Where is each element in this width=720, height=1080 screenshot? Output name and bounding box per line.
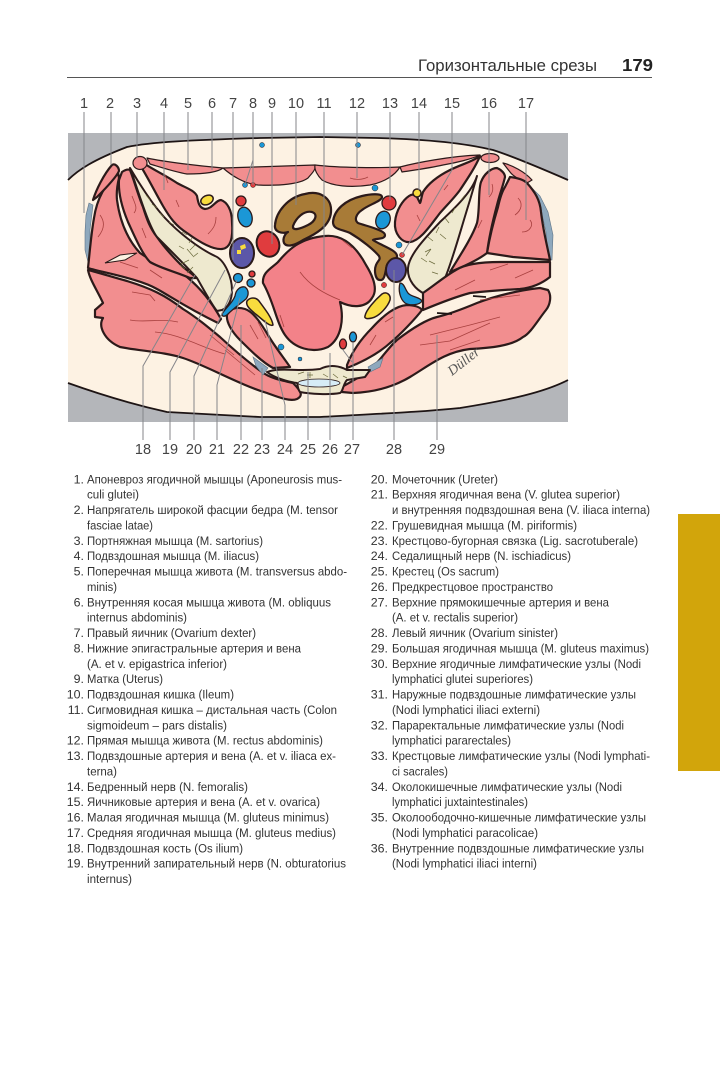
side tab (678, 514, 720, 771)
bottom callout numbers: 25 (300, 442, 316, 458)
bottom callout numbers: 28 (386, 442, 402, 458)
legend column 2: Околоободочно-кишечные лимфатические узлы (392, 811, 646, 825)
legend column 1: Апоневроз ягодичной мышцы (Aponeurosis mus- (87, 472, 342, 486)
sacrotuberous ligament right (368, 358, 383, 372)
legend column 2: (Nodi lymphatici paracolicae) (392, 826, 538, 840)
piriformis right (347, 305, 422, 368)
legend column 1: culi glutei) (87, 488, 139, 502)
legend column 1: 19. (67, 857, 84, 871)
femoral nerve right (413, 189, 421, 197)
legend column 2: Мочеточник (Ureter) (392, 472, 498, 486)
legend column 2: (Nodi lymphatici iliaci interni) (392, 857, 537, 871)
legend column 1: Прямая мышца живота (M. rectus abdominis) (87, 734, 323, 748)
legend column 2: 31. (371, 688, 388, 702)
top callout numbers: 15 (444, 96, 460, 112)
legend column 2: Верхняя ягодичная вена (V. glutea superior) (392, 488, 620, 502)
legend column 2: 34. (371, 780, 388, 794)
legend column 2: 22. (371, 518, 388, 532)
top callout numbers: 13 (382, 96, 398, 112)
legend column 1: terna) (87, 764, 117, 778)
top callout numbers: 2 (106, 96, 114, 112)
legend column 2: Левый яичник (Ovarium sinister) (392, 626, 558, 640)
legend column 1: Портняжная мышца (M. sartorius) (87, 534, 263, 548)
ilium right (408, 176, 477, 294)
abdominal wall muscles left (147, 158, 223, 174)
page number: 179 (622, 55, 653, 75)
left iliac vessels (373, 196, 396, 231)
legend column 1: 17. (67, 826, 84, 840)
iliacus left (140, 162, 232, 249)
sartorius left (133, 156, 147, 170)
legend column 2: Верхние ягодичные лимфатические узлы (Nodi (392, 657, 641, 671)
bottom callout numbers: 22 (233, 442, 249, 458)
legend column 1: Средняя ягодичная мышца (M. gluteus medius) (87, 826, 336, 840)
gluteus maximus left (88, 270, 301, 400)
legend column 2: 27. (371, 595, 388, 609)
legend column 1: 12. (67, 734, 84, 748)
legend column 1: (A. et v. epigastrica inferior) (87, 657, 227, 671)
legend column 2: Седалищный нерв (N. ischiadicus) (392, 549, 571, 563)
aponeurosis left (1) (85, 203, 93, 270)
legend column 1: Нижние эпигастральные артерия и вена (87, 642, 301, 656)
legend column 2: Крестцово-бугорная связка (Lig. sacrotuberale) (392, 534, 638, 548)
legend column 2: Околокишечные лимфатические узлы (Nodi (392, 780, 622, 794)
legend column 2: Наружные подвздошные лимфатические узлы (392, 688, 636, 702)
rectus abdominis left (223, 165, 315, 185)
legend column 2: (Nodi lymphatici iliaci externi) (392, 703, 540, 717)
legend column 2: Крестцовые лимфатические узлы (Nodi lymphati- (392, 749, 650, 763)
legend column 2: 29. (371, 642, 388, 656)
legend column 1: Внутренняя косая мышца живота (M. obliquus (87, 595, 331, 609)
sciatic nerve left (247, 298, 273, 325)
top callout numbers: 8 (249, 96, 257, 112)
legend column 2: Верхние прямокишечные артерия и вена (392, 595, 609, 609)
legend column 1: Яичниковые артерия и вена (A. et v. ovarica) (87, 795, 320, 809)
legend column 2: lymphatici juxtaintestinales) (392, 795, 528, 809)
legend column 1: 16. (67, 811, 84, 825)
femoral nerve left (199, 193, 215, 207)
legend column 2: 35. (371, 811, 388, 825)
legend column 2: 36. (371, 841, 388, 855)
legend column 1: Правый яичник (Ovarium dexter) (87, 626, 256, 640)
legend column 1: 9. (74, 672, 84, 686)
gluteal vein right (399, 283, 422, 305)
legend column 1: Сигмовидная кишка – дистальная часть (Colon (87, 703, 337, 717)
legend column 2: 30. (371, 657, 388, 671)
legend column 1: 3. (74, 534, 84, 548)
legend column 1: Внутренний запирательный нерв (N. obturatorius (87, 857, 346, 871)
bottom callout numbers: 24 (277, 442, 293, 458)
sciatic nerve right (365, 293, 390, 319)
legend column 1: 13. (67, 749, 84, 763)
top callout numbers: 17 (518, 96, 534, 112)
top callout numbers: 3 (133, 96, 141, 112)
top callout numbers (80, 96, 534, 112)
gluteus maximus right (342, 288, 550, 393)
iliacus right (395, 156, 480, 242)
legend column 1: Напрягатель широкой фасции бедра (M. tensor (87, 503, 338, 517)
superior rectal vessels (340, 332, 356, 349)
header title: Горизонтальные срезы (418, 56, 597, 75)
leader lines (84, 112, 526, 440)
legend column 2: Крестец (Os sacrum) (392, 565, 499, 579)
tensor fasciae latae left (93, 164, 119, 200)
legend column 1: fasciae latae) (87, 518, 153, 532)
ileum (275, 193, 331, 246)
bottom callout numbers: 23 (254, 442, 270, 458)
rectus abdominis right (315, 165, 400, 186)
anatomical cross-section illustration (68, 133, 568, 422)
pelvic veins and arteries left (222, 271, 255, 316)
legend column 1: 8. (74, 642, 84, 656)
legend column 2: lymphatici glutei superiores) (392, 672, 533, 686)
legend column 1: Подвздошная мышца (M. iliacus) (87, 549, 259, 563)
tensor fasciae latae right (503, 163, 532, 183)
legend column 2 (371, 472, 650, 871)
legend column 2: 26. (371, 580, 388, 594)
bottom callout numbers: 18 (135, 442, 151, 458)
gluteus medius left (88, 172, 221, 323)
top callout numbers: 12 (349, 96, 365, 112)
gluteus minimus left (119, 170, 197, 278)
gluteus medius right (487, 177, 550, 260)
white slit left (105, 253, 137, 263)
uterine vessel (253, 228, 283, 260)
legend column 1: Подвздошные артерия и вена (A. et v. iliaca ex- (87, 749, 336, 763)
legend column 1: 10. (67, 688, 84, 702)
gluteus maximus slits right (437, 296, 486, 314)
legend column 1: 7. (74, 626, 84, 640)
legend column 1: sigmoideum – pars distalis) (87, 718, 227, 732)
top callout numbers: 7 (229, 96, 237, 112)
uterus (263, 236, 375, 350)
top callout numbers: 10 (288, 96, 304, 112)
gluteus medius lower band right (423, 262, 550, 310)
legend column 1: 2. (74, 503, 84, 517)
legend column 1: minis) (87, 580, 117, 594)
legend column 1: Малая ягодичная мышца (M. gluteus minimus) (87, 811, 329, 825)
ilium left (130, 168, 232, 311)
top callout numbers: 16 (481, 96, 497, 112)
legend column 1: 14. (67, 780, 84, 794)
background panel (68, 133, 568, 422)
sigmoid colon (333, 194, 397, 280)
legend column 2: 28. (371, 626, 388, 640)
legend column 2: Грушевидная мышца (M. piriformis) (392, 518, 577, 532)
legend column 2: (A. et v. rectalis superior) (392, 611, 518, 625)
legend column 2: 21. (371, 488, 388, 502)
legend column 1: Бедренный нерв (N. femoralis) (87, 780, 248, 794)
legend column 2: 24. (371, 549, 388, 563)
gluteus minimus right (450, 168, 505, 272)
legend column 2: 20. (371, 472, 388, 486)
legend column 2: 25. (371, 565, 388, 579)
legend column 1: 4. (74, 549, 84, 563)
bottom callout numbers: 29 (429, 442, 445, 458)
body outline (68, 137, 568, 417)
legend column 1: 15. (67, 795, 84, 809)
legend column 1: 18. (67, 841, 84, 855)
legend column 1: 1. (74, 472, 84, 486)
sartorius right (481, 154, 499, 162)
bottom callout numbers: 19 (162, 442, 178, 458)
left ovary (386, 258, 406, 282)
legend column 2: 23. (371, 534, 388, 548)
right ovary (230, 238, 254, 268)
legend column 1: Матка (Uterus) (87, 672, 163, 686)
legend column 1: internus abdominis) (87, 611, 187, 625)
abdominal wall muscles right (400, 155, 480, 172)
legend column 1: internus) (87, 872, 132, 886)
piriformis left (227, 308, 290, 368)
legend column 1: 6. (74, 595, 84, 609)
top callout numbers: 6 (208, 96, 216, 112)
bottom callout numbers: 26 (322, 442, 338, 458)
small vessels and nodes (242, 142, 404, 361)
legend column 1 (67, 472, 347, 886)
legend column 2: и внутренняя подвздошная вена (V. iliaca interna) (392, 503, 650, 517)
sacrum (267, 366, 370, 394)
legend column 2: Предкрестцовое пространство (392, 580, 553, 594)
top callout numbers: 14 (411, 96, 427, 112)
legend column 2: 33. (371, 749, 388, 763)
signature: Düller (444, 344, 484, 380)
right iliac vessels (236, 196, 254, 228)
top callout numbers: 11 (316, 96, 332, 112)
top callout numbers: 9 (268, 96, 276, 112)
top callout numbers: 4 (160, 96, 168, 112)
bottom callout numbers: 20 (186, 442, 202, 458)
top callout numbers: 1 (80, 96, 88, 112)
legend column 1: Поперечная мышца живота (M. transversus abdo- (87, 565, 347, 579)
sacral canal (298, 379, 340, 387)
bottom callout numbers (135, 442, 445, 458)
legend column 1: Подвздошная кишка (Ileum) (87, 688, 234, 702)
legend column 2: Большая ягодичная мышца (M. gluteus maximus) (392, 642, 649, 656)
legend column 2: 32. (371, 718, 388, 732)
page header (67, 55, 653, 78)
legend column 2: Параректальные лимфатические узлы (Nodi (392, 718, 624, 732)
top callout numbers: 5 (184, 96, 192, 112)
bottom callout numbers: 27 (344, 442, 360, 458)
bottom callout numbers: 21 (209, 442, 225, 458)
aponeurosis right (527, 183, 553, 260)
legend column 2: ci sacrales) (392, 764, 448, 778)
sacrotuberous ligament left (253, 357, 268, 375)
legend column 1: 11. (68, 703, 84, 717)
legend column 2: lymphatici pararectales) (392, 734, 511, 748)
legend column 2: Внутренние подвздошные лимфатические узлы (392, 841, 644, 855)
legend column 1: Подвздошная кость (Os ilium) (87, 841, 243, 855)
legend column 1: 5. (74, 565, 84, 579)
